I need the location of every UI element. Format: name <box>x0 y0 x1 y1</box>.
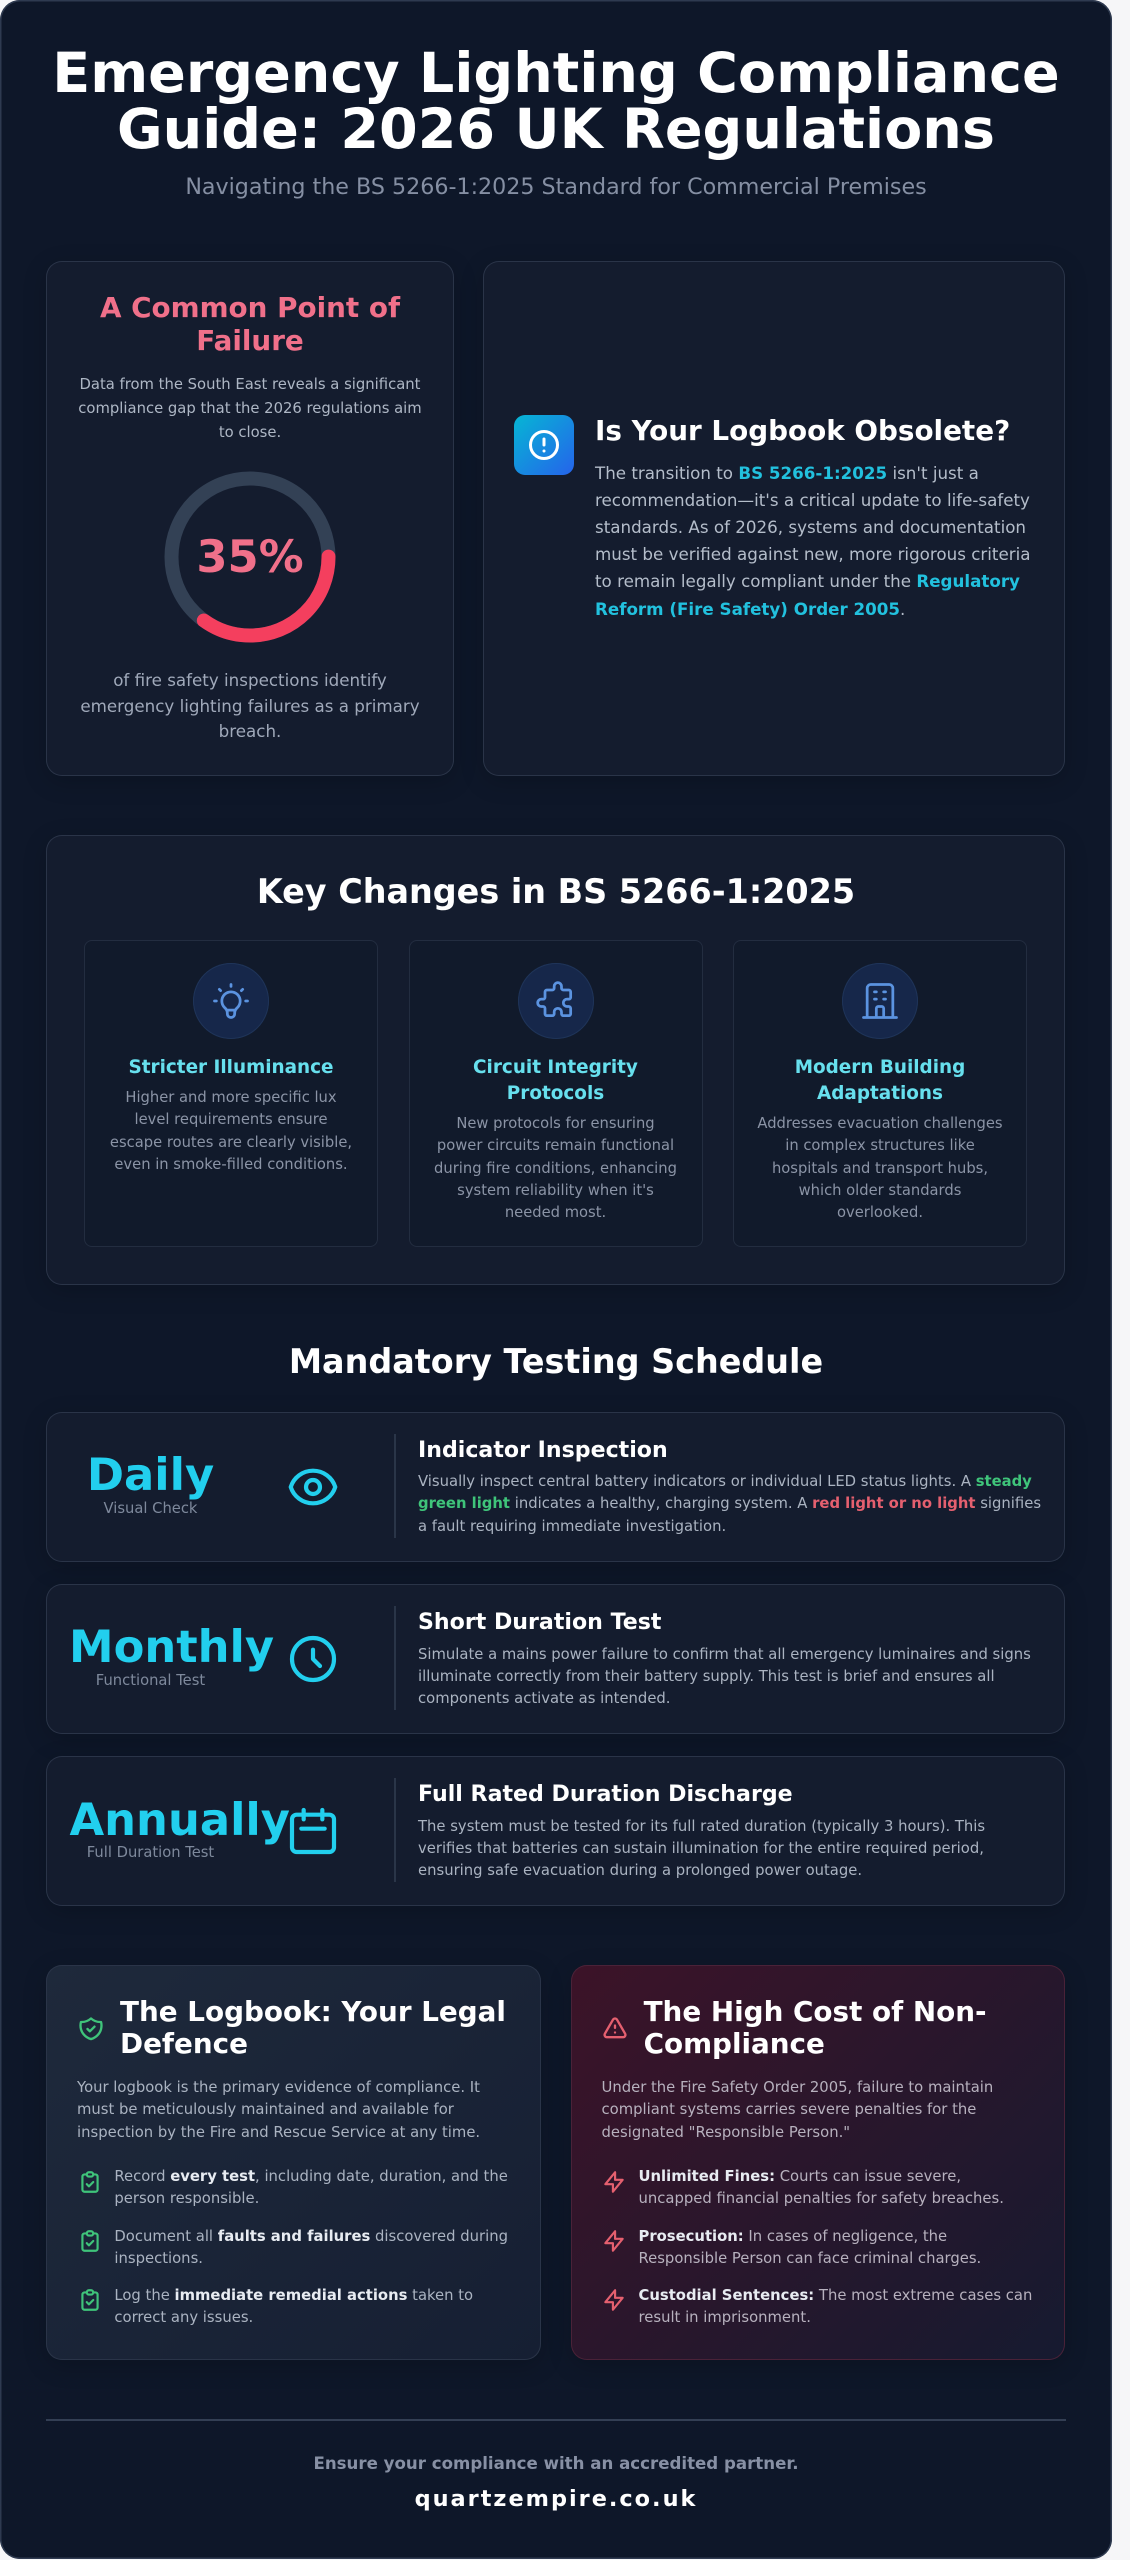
panel: high cost of non-compliance <box>571 1965 1065 2360</box>
row text <box>418 1646 1031 1707</box>
stat: 35%: 35% <box>196 530 304 582</box>
intro text: must be meticulously maintained and available for <box>77 2101 454 2118</box>
row text: ensuring safe evacuation during a prolonged power outage. <box>418 1862 862 1879</box>
intro text: Data from the South East reveals a significant <box>80 376 420 393</box>
icon: clock <box>290 1636 336 1682</box>
card text <box>757 1115 1003 1221</box>
list item: uncapped financial penalties for safety breaches. <box>638 2190 1004 2207</box>
label: monthly: Monthly <box>69 1620 274 1673</box>
list item <box>114 2168 508 2207</box>
list item: Prosecution: In cases of negligence, the <box>638 2228 947 2244</box>
row: daily <box>46 1412 1065 1562</box>
row text: verifies that batteries can sustain illumination for the entire required period, <box>418 1840 984 1857</box>
icon: clipboard check <box>81 2230 99 2252</box>
stat caption: of fire safety inspections identify <box>113 670 387 690</box>
icon: eye <box>288 1468 338 1506</box>
list item: Log the immediate remedial actions taken to <box>114 2286 473 2304</box>
card text: power circuits remain functional <box>437 1137 674 1154</box>
card title: Modern Building <box>795 1056 965 1078</box>
card text: Addresses evacuation challenges <box>757 1115 1003 1132</box>
list item: person responsible. <box>114 2190 259 2207</box>
row: monthly <box>46 1584 1065 1734</box>
icon: shield check <box>79 2017 103 2040</box>
row text: The system must be tested for its full rated duration (typically 3 hours). This <box>418 1818 985 1835</box>
stat caption <box>80 670 420 741</box>
row title: Short Duration Test <box>418 1609 661 1635</box>
body text <box>594 463 1030 619</box>
row text: Simulate a mains power failure to confirm that all emergency luminaires and signs <box>418 1646 1031 1663</box>
icon: alert circle <box>514 415 574 475</box>
icon: calendar <box>290 1808 336 1854</box>
row text: components activate as intended. <box>418 1690 671 1707</box>
card title <box>795 1056 965 1104</box>
footer tagline: Ensure your compliance with an accredited partner. <box>313 2454 799 2472</box>
icon: warning triangle <box>603 2017 627 2038</box>
icon: bolt <box>604 2171 624 2193</box>
list item <box>114 2228 508 2267</box>
card title: Stricter Illuminance <box>128 1056 334 1078</box>
row text: a fault requiring immediate investigation. <box>418 1518 726 1535</box>
card text: even in smoke-filled conditions. <box>114 1156 348 1173</box>
intro text: inspection by the Fire and Rescue Service at any time. <box>77 2124 480 2140</box>
body text: must be verified against new, more rigorous criteria <box>595 544 1030 564</box>
list item <box>638 2168 1004 2207</box>
label: annually: Annually <box>70 1792 290 1846</box>
title: Guide: 2026 UK Regulations <box>117 97 995 162</box>
intro text: compliance gap that the 2026 regulations aim <box>78 400 422 417</box>
icon: clipboard check <box>81 2171 99 2193</box>
card text <box>110 1089 352 1173</box>
list item: Document all faults and failures discovered during <box>114 2228 508 2244</box>
heading: key changes: Key Changes in BS 5266-1:2025 <box>257 872 855 911</box>
heading: The High Cost of Non- <box>644 1995 987 2028</box>
panel: common point of failure <box>46 261 454 776</box>
heading: Defence <box>120 2027 248 2060</box>
donut chart: 35 percent <box>164 472 336 642</box>
intro text: to close. <box>219 424 281 441</box>
card: stricter illuminance <box>84 940 378 1247</box>
icon: office building <box>842 963 918 1039</box>
label: daily: Daily <box>87 1448 214 1501</box>
card: circuit integrity <box>408 940 702 1247</box>
panel: is your logbook obsolete <box>483 261 1065 776</box>
sublabel: Functional Test <box>96 1672 205 1689</box>
intro text <box>602 2079 993 2140</box>
card text: level requirements ensure <box>134 1111 328 1128</box>
card text: escape routes are clearly visible, <box>110 1134 352 1151</box>
row text: Visually inspect central battery indicators or individual LED status lights. A steady <box>418 1473 1032 1490</box>
row text: green light indicates a healthy, charging system. A red light or no light signifies <box>418 1495 1041 1512</box>
list item: correct any issues. <box>114 2309 253 2326</box>
card text: New protocols for ensuring <box>456 1115 655 1132</box>
list item <box>638 2286 1032 2326</box>
panel: key changes <box>46 835 1065 1285</box>
list item <box>638 2228 981 2267</box>
card text: in complex structures like <box>785 1137 975 1154</box>
list item: Unlimited Fines: Courts can issue severe, <box>638 2168 961 2185</box>
title <box>52 41 1060 162</box>
icon: bolt <box>604 2230 624 2252</box>
list item <box>114 2286 473 2326</box>
heading: Compliance <box>644 2027 825 2060</box>
footer website: quartzempire.co.uk <box>415 2486 697 2512</box>
heading <box>644 1995 987 2060</box>
sublabel: Visual Check <box>104 1500 197 1517</box>
icon: bolt <box>604 2289 624 2311</box>
sublabel: Full Duration Test <box>87 1844 214 1861</box>
icon: light bulb <box>193 963 269 1039</box>
row text: illuminate correctly from their battery supply. This test is brief and ensures all <box>418 1668 995 1685</box>
body text: recommendation—it's a critical update to life-safety <box>595 490 1030 510</box>
row text <box>418 1473 1041 1535</box>
heading: common point of failure <box>100 291 400 357</box>
icon: puzzle <box>518 963 594 1039</box>
subtitle: Navigating the BS 5266-1:2025 Standard for Commercial Premises <box>185 174 927 200</box>
heading: common point of failure: A Common Point of <box>100 291 400 324</box>
card text: system reliability when it's <box>457 1182 654 1199</box>
stat caption: breach. <box>219 721 281 741</box>
intro text: designated "Responsible Person." <box>602 2124 850 2140</box>
heading <box>120 1995 506 2060</box>
body text: Reform (Fire Safety) Order 2005. <box>595 599 905 619</box>
heading: The Logbook: Your Legal <box>120 1995 506 2028</box>
card title: Protocols <box>507 1082 604 1104</box>
heading: mandatory testing schedule: Mandatory Testing Schedule <box>289 1342 823 1381</box>
list item: Record every test, including date, duration, and the <box>114 2168 508 2185</box>
card text: during fire conditions, enhancing <box>434 1160 677 1177</box>
body text: standards. As of 2026, systems and documentation <box>595 517 1026 537</box>
list item: inspections. <box>114 2250 203 2267</box>
card text: overlooked. <box>837 1204 923 1221</box>
card text: hospitals and transport hubs, <box>772 1160 988 1177</box>
card text: which older standards <box>799 1182 961 1199</box>
card title <box>473 1056 638 1104</box>
body text: The transition to BS 5266-1:2025 isn't just a <box>595 463 979 483</box>
body text: to remain legally compliant under the Regulatory <box>595 571 1020 591</box>
list item: result in imprisonment. <box>638 2309 811 2326</box>
intro text: compliant systems carries severe penalties for the <box>602 2101 976 2118</box>
row title: Full Rated Duration Discharge <box>418 1781 793 1807</box>
title: Emergency Lighting Compliance <box>52 41 1060 106</box>
row text <box>418 1818 985 1879</box>
stat caption: emergency lighting failures as a primary <box>80 696 420 716</box>
heading: common point of failure: Failure <box>196 324 304 357</box>
card text <box>434 1115 677 1221</box>
card text: needed most. <box>505 1204 606 1221</box>
list item: Custodial Sentences: The most extreme cases can <box>638 2286 1032 2304</box>
intro text: Under the Fire Safety Order 2005, failure to maintain <box>602 2079 993 2096</box>
intro text <box>77 2079 480 2140</box>
intro text <box>78 376 422 441</box>
icon: clipboard check <box>81 2289 99 2311</box>
row: annually <box>46 1756 1065 1906</box>
panel: the logbook <box>46 1965 541 2360</box>
card: modern building <box>733 940 1027 1247</box>
row title: Indicator Inspection <box>418 1437 668 1463</box>
heading: logbook obsolete: Is Your Logbook Obsolete? <box>595 414 1010 447</box>
intro text: Your logbook is the primary evidence of compliance. It <box>77 2079 480 2096</box>
card text: Higher and more specific lux <box>125 1089 337 1106</box>
card title: Adaptations <box>817 1082 943 1104</box>
list item: Responsible Person can face criminal charges. <box>638 2250 981 2267</box>
card title: Circuit Integrity <box>473 1056 638 1078</box>
